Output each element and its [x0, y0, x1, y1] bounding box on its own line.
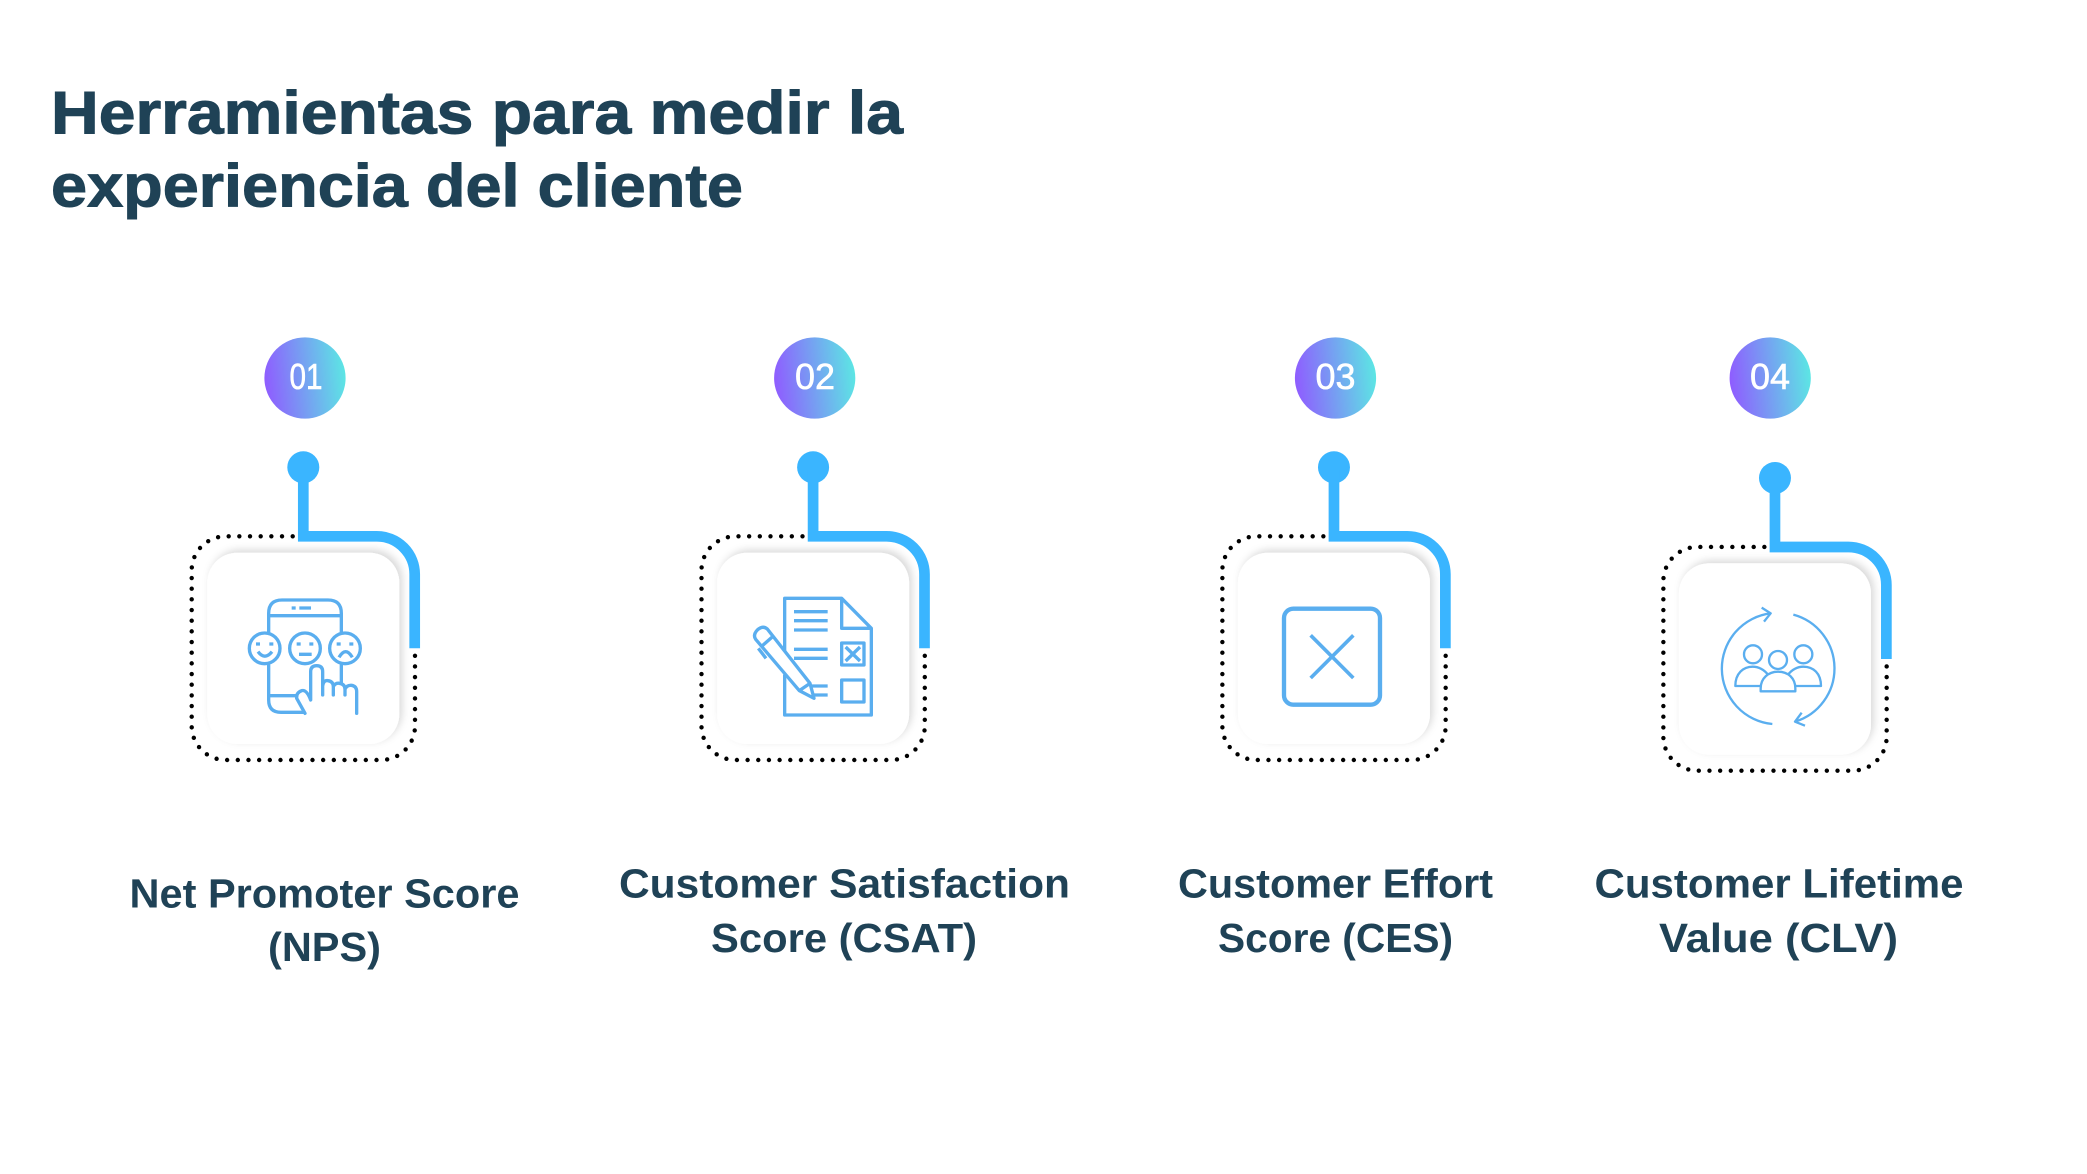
label: Customer Satisfaction Score: Score (CSAT)	[711, 915, 977, 961]
number badge 03: 03	[1316, 356, 1356, 397]
icon: survey form with pen	[754, 598, 871, 715]
white card	[1679, 563, 1871, 755]
label: Customer Effort Score: Customer Effort	[1178, 860, 1493, 906]
panel: CSAT icon card	[702, 451, 925, 760]
icon: phone with smiley faces and pointing hand	[249, 600, 360, 713]
label: Net Promoter Score: (NPS)	[268, 924, 381, 970]
title: Herramientas para medir la	[51, 79, 904, 146]
number badge 01: 01	[290, 356, 322, 397]
label: Customer Effort Score: Score (CES)	[1218, 915, 1453, 961]
white card	[207, 553, 399, 744]
number badge 04	[1730, 337, 1811, 419]
panel: CES icon card	[1222, 451, 1446, 760]
connector line with dot	[287, 451, 415, 648]
icon: x in a rounded square	[1284, 609, 1380, 705]
number badge 02	[774, 337, 855, 419]
title: experiencia del cliente	[51, 152, 743, 219]
dotted frame	[1222, 536, 1446, 760]
dotted frame	[702, 536, 925, 760]
connector line with dot	[797, 451, 924, 648]
dotted frame	[1663, 547, 1887, 771]
connector line with dot	[1318, 451, 1445, 648]
dotted frame	[192, 536, 415, 760]
label: Customer Lifetime Value: Value (CLV)	[1659, 915, 1898, 961]
number badge 01	[264, 337, 346, 419]
white card	[1238, 553, 1430, 744]
icon: group of people with cycle arrows	[1722, 608, 1834, 726]
white card	[717, 553, 909, 744]
title	[51, 79, 904, 219]
number badge 04: 04	[1750, 356, 1790, 397]
number badge 03	[1295, 337, 1376, 419]
panel: CLV icon card	[1663, 462, 1887, 771]
connector line with dot	[1759, 462, 1886, 659]
number badge 02: 02	[795, 356, 835, 397]
label: Customer Lifetime Value: Customer Lifetime	[1594, 860, 1964, 906]
label: Customer Satisfaction Score: Customer Satisfaction	[619, 860, 1070, 906]
panel: NPS icon card	[192, 451, 415, 760]
label: Net Promoter Score: Net Promoter Score	[130, 870, 520, 916]
